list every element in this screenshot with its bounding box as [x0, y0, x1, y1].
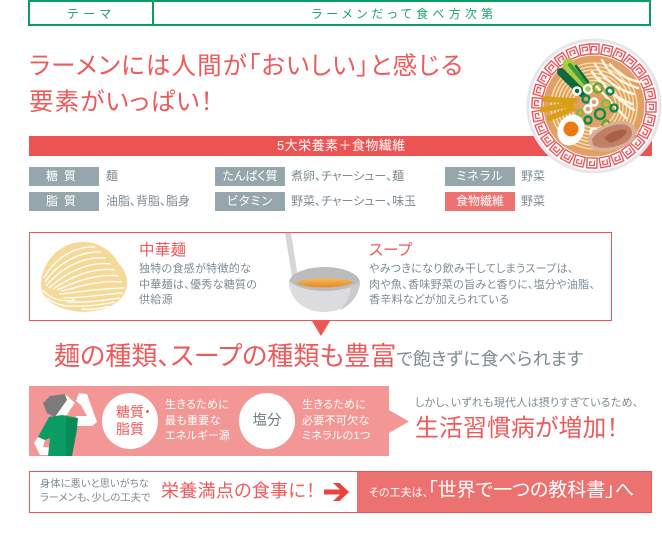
nutrition message: 栄養満点の食事に！ [161, 481, 315, 501]
soup heading: スープ [369, 242, 412, 259]
label: vitamin [215, 192, 285, 211]
soup description [369, 262, 595, 306]
soup description: やみつきになり飲み干してしまうスープは、 [369, 263, 574, 275]
theme header bar [28, 0, 651, 26]
theme title: ラーメンだって食べ方次第 [312, 7, 497, 21]
theme label: テーマ [67, 7, 116, 21]
label: carbohydrate [29, 167, 99, 186]
circle: carbs and fat [102, 393, 158, 449]
main heading: 要素がいっぱい！ [29, 89, 214, 116]
icon: noodles [40, 242, 128, 312]
circle: carbs and fat: 糖質・ [116, 404, 151, 420]
value: 煮卵、チャーシュー、麺 [291, 169, 404, 183]
lifestyle note: しかし、いずれも現代人は摂りすぎているため、 [415, 397, 638, 409]
nutrient table [29, 167, 545, 211]
summary statement: 麺の種類、スープの種類も豊富で飽きずに食べられます [54, 341, 583, 371]
value: 麺 [106, 169, 118, 183]
icon: ramen bowl [526, 38, 662, 174]
salt description: 必要不可欠な [302, 414, 370, 426]
salt description: 生きるために [302, 399, 366, 411]
arrow: down triangle [312, 321, 330, 336]
soup description: 香辛料などが加えられている [369, 294, 509, 306]
circle: salt [239, 393, 295, 449]
panel: salt and carbs [29, 386, 389, 456]
main heading [29, 53, 464, 116]
noodles description [139, 262, 257, 306]
carbs description: 生きるために [165, 399, 229, 411]
value: 野菜 [521, 169, 545, 183]
label: fiber: 食物繊維 [456, 194, 504, 208]
label: protein [215, 167, 285, 186]
carbs description: エネルギー源 [165, 430, 230, 442]
call to action panel [357, 472, 651, 512]
theme title [152, 2, 649, 24]
value: 油脂、背脂、脂身 [106, 194, 190, 208]
call to action text: その工夫は、「世界で一つの教科書」へ [369, 480, 634, 501]
noodles description: 中華麺は、優秀な糖質の [139, 278, 257, 290]
noodles description: 供給源 [139, 294, 173, 306]
noodles description: 独特の食感が特徴的な [139, 263, 251, 275]
value: 野菜 [521, 194, 545, 208]
arrow: right [324, 483, 349, 501]
label: vitamin: ビタミン [227, 194, 273, 208]
label: mineral: ミネラル [456, 169, 504, 183]
icon: soup ladle [285, 233, 360, 312]
lifestyle disease heading: 生活習慣病が増加！ [415, 415, 619, 442]
circle: salt: 塩分 [252, 413, 282, 429]
small lead text [40, 478, 150, 504]
label: fat [29, 192, 99, 211]
carbs description: 最も重要な [165, 414, 221, 426]
noodles heading: 中華麺 [139, 242, 186, 259]
value: 野菜、チャーシュー、味玉 [291, 194, 416, 208]
panel: noodles and soup [29, 232, 612, 321]
label: fat: 脂質 [46, 194, 82, 208]
label: mineral [445, 167, 515, 186]
salt description [302, 398, 371, 442]
arrow: right pointer [389, 410, 409, 433]
bottom banner [29, 471, 652, 513]
small lead text: ラーメンも、少しの工夫で [40, 493, 150, 504]
nutrient banner [29, 136, 652, 156]
label: fiber [445, 192, 515, 211]
carbs description [165, 398, 230, 442]
icon: man flexing [34, 393, 97, 456]
salt description: ミネラルの1つ [302, 430, 371, 442]
small lead text: 身体に悪いと思いがちな [40, 479, 149, 490]
circle: carbs and fat: 脂質 [116, 421, 144, 437]
soup description: 肉や魚、香味野菜の旨みと香りに、塩分や油脂、 [369, 278, 595, 290]
label: protein: たんぱく質 [222, 169, 277, 183]
main heading: ラーメンには人間が「おいしい」と感じる [29, 53, 464, 80]
banner text: 5大栄養素＋食物繊維 [277, 138, 406, 153]
label: carbohydrate: 糖質 [46, 169, 82, 183]
